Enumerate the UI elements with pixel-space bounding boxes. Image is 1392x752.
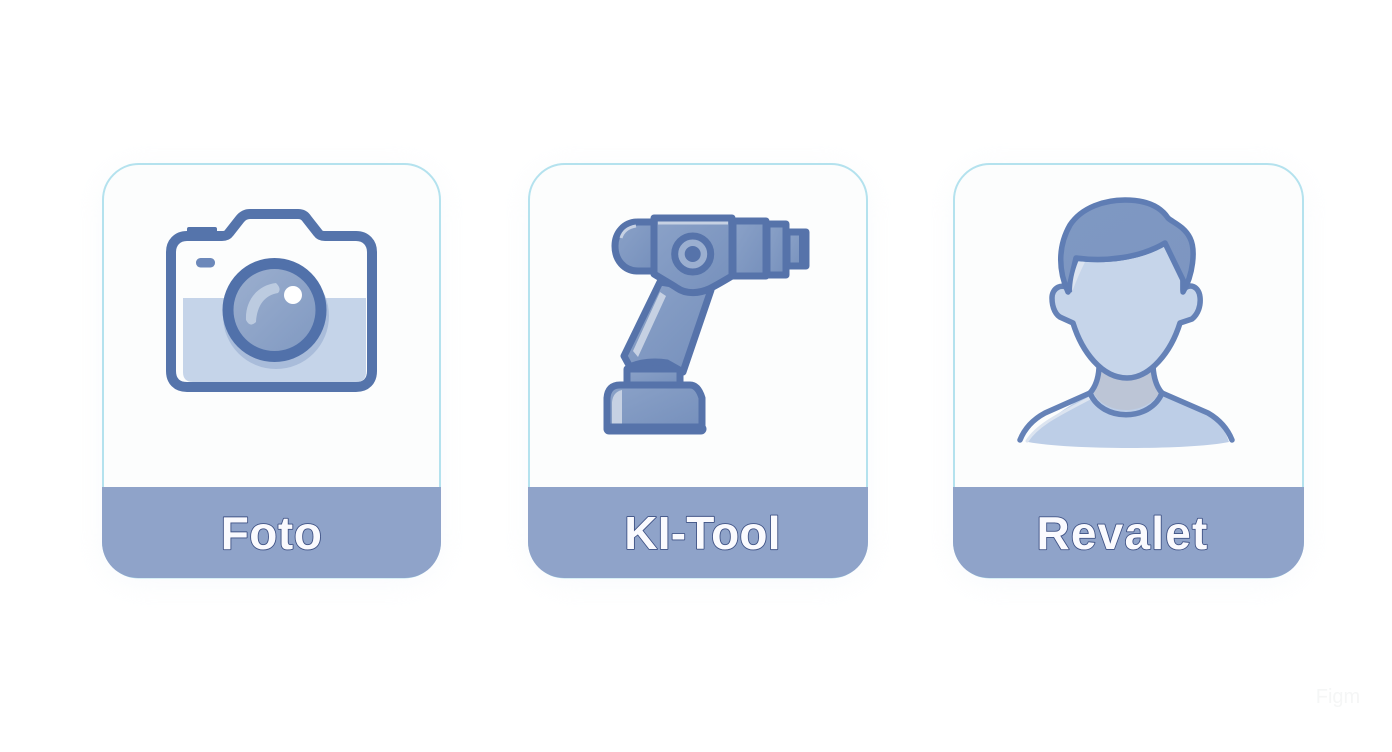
panel: KI-Tool <box>528 164 868 583</box>
icon: drill <box>607 218 807 431</box>
card background <box>103 164 440 578</box>
icon: person <box>1020 200 1232 448</box>
card background <box>529 164 867 578</box>
panel: Foto <box>102 164 441 583</box>
label band <box>528 487 868 578</box>
label band <box>953 487 1304 578</box>
label: KI-Tool: KI-Tool <box>624 507 781 559</box>
label band <box>102 487 441 578</box>
panel: Revalet <box>953 164 1304 583</box>
icon: camera <box>171 214 372 387</box>
watermark: Figm <box>1316 686 1360 708</box>
label: Foto: Foto <box>221 507 322 559</box>
card background <box>954 164 1303 578</box>
label: Revalet: Revalet <box>1036 507 1209 559</box>
